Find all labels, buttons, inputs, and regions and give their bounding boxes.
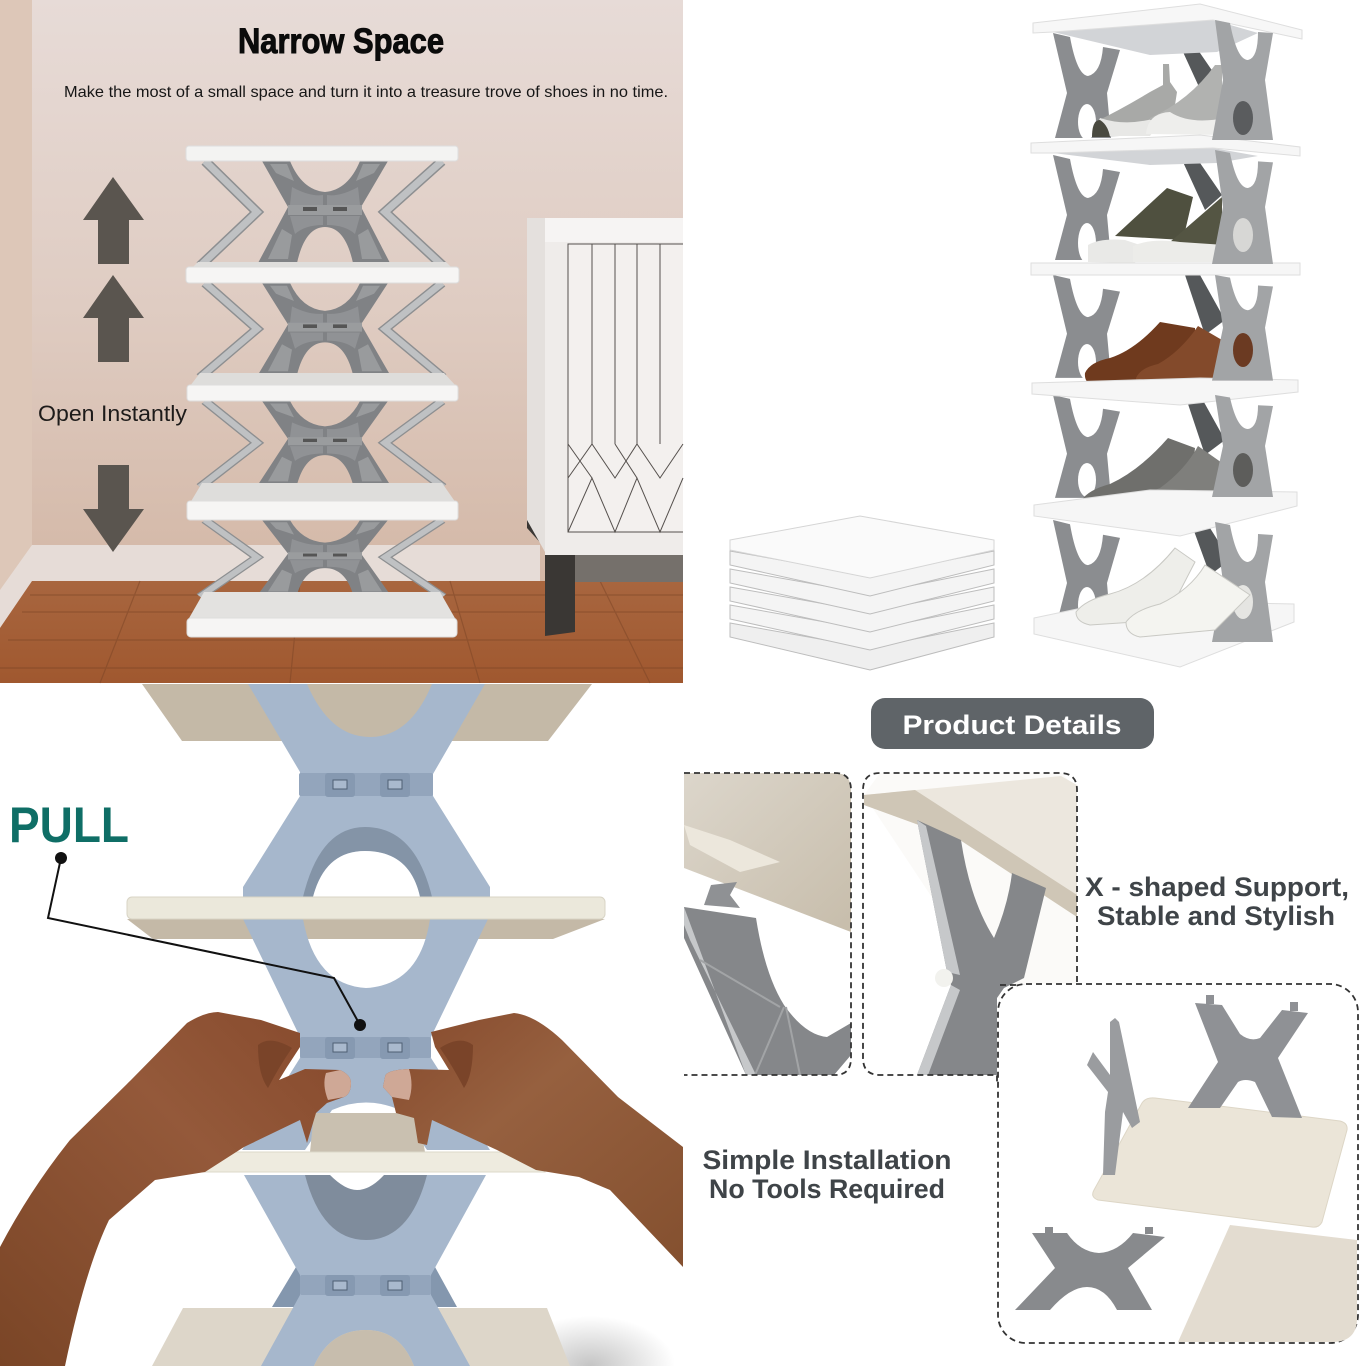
lower shelf back tray <box>310 1113 425 1152</box>
baseboard <box>0 545 540 628</box>
right hand <box>383 1013 683 1267</box>
folding shoe rack <box>186 146 459 637</box>
shoes: grey sneakers <box>1092 64 1225 137</box>
detail photo: hinge clip <box>684 773 851 1075</box>
caption: X-shaped support: Stable and Stylish <box>1097 901 1335 931</box>
panel: rack with shoes and folded stack <box>730 4 1302 670</box>
right front columns <box>1212 20 1273 642</box>
icon: up arrow lower <box>83 275 144 362</box>
shelf 2 underside <box>1053 148 1258 165</box>
shelf underside <box>127 919 605 939</box>
middle beige shelf <box>127 897 605 919</box>
shoe rack tower <box>1031 4 1302 667</box>
shoes: white flats <box>1076 548 1250 637</box>
back dark supports <box>1183 50 1230 575</box>
caption: simple installation: Simple Installation <box>702 1145 952 1175</box>
caption: X-shaped support: X - shaped Support, <box>1085 872 1349 902</box>
shoes: grey slip-ons <box>1082 438 1252 516</box>
arch inset <box>303 827 432 897</box>
caption: X-shaped support <box>1085 872 1349 931</box>
folded shelf stack <box>730 516 994 670</box>
panel: pull demonstration <box>0 684 683 1366</box>
panel: narrow space room scene <box>0 0 683 683</box>
panel: product details <box>684 698 1358 1343</box>
subtitle text: Make the most of a small space and turn it into a treasure trove of shoes in no time. <box>64 84 668 101</box>
badge: Product Details <box>871 698 1154 749</box>
icon: up arrow top <box>83 177 144 264</box>
cabinet <box>527 218 683 636</box>
detail photo: installation parts <box>998 984 1358 1343</box>
icon: down arrow <box>83 465 144 552</box>
caption: simple installation: No Tools Required <box>709 1174 945 1204</box>
lower blue X <box>244 1175 486 1366</box>
blue X supports <box>127 684 605 1307</box>
upper beige shelf <box>142 684 592 741</box>
lower beige shelf <box>195 1152 545 1172</box>
shelves 2 to 6 <box>1031 135 1300 667</box>
top shelf underside <box>1053 20 1258 55</box>
bottom beige shelf <box>152 1308 570 1366</box>
shoes: olive sneakers <box>1088 188 1225 263</box>
wood floor <box>0 581 683 683</box>
flat X support <box>1015 1227 1165 1310</box>
detail photo: X support <box>863 773 1077 1085</box>
label: PULL: PULL <box>9 797 129 853</box>
left columns <box>1053 33 1120 630</box>
title: Narrow Space: Narrow Space <box>238 22 444 61</box>
pointer line <box>48 852 366 1031</box>
standing X support <box>1188 995 1308 1118</box>
badge: Product Details: Product Details <box>902 710 1122 740</box>
room wall <box>0 0 683 683</box>
corner shelf board <box>1178 1225 1357 1342</box>
shoes: brown loafers <box>1085 322 1252 390</box>
caption: simple installation <box>702 1145 952 1204</box>
label: Open Instantly: Open Instantly <box>38 401 187 426</box>
top shelf <box>1033 4 1302 39</box>
floor shadow <box>505 1316 675 1366</box>
beige shelf board <box>1093 1098 1347 1227</box>
back struts <box>272 1267 457 1307</box>
left hand <box>0 1012 351 1366</box>
middle hinge <box>300 1037 431 1059</box>
side X support <box>1087 1018 1140 1175</box>
hinge <box>299 773 433 797</box>
